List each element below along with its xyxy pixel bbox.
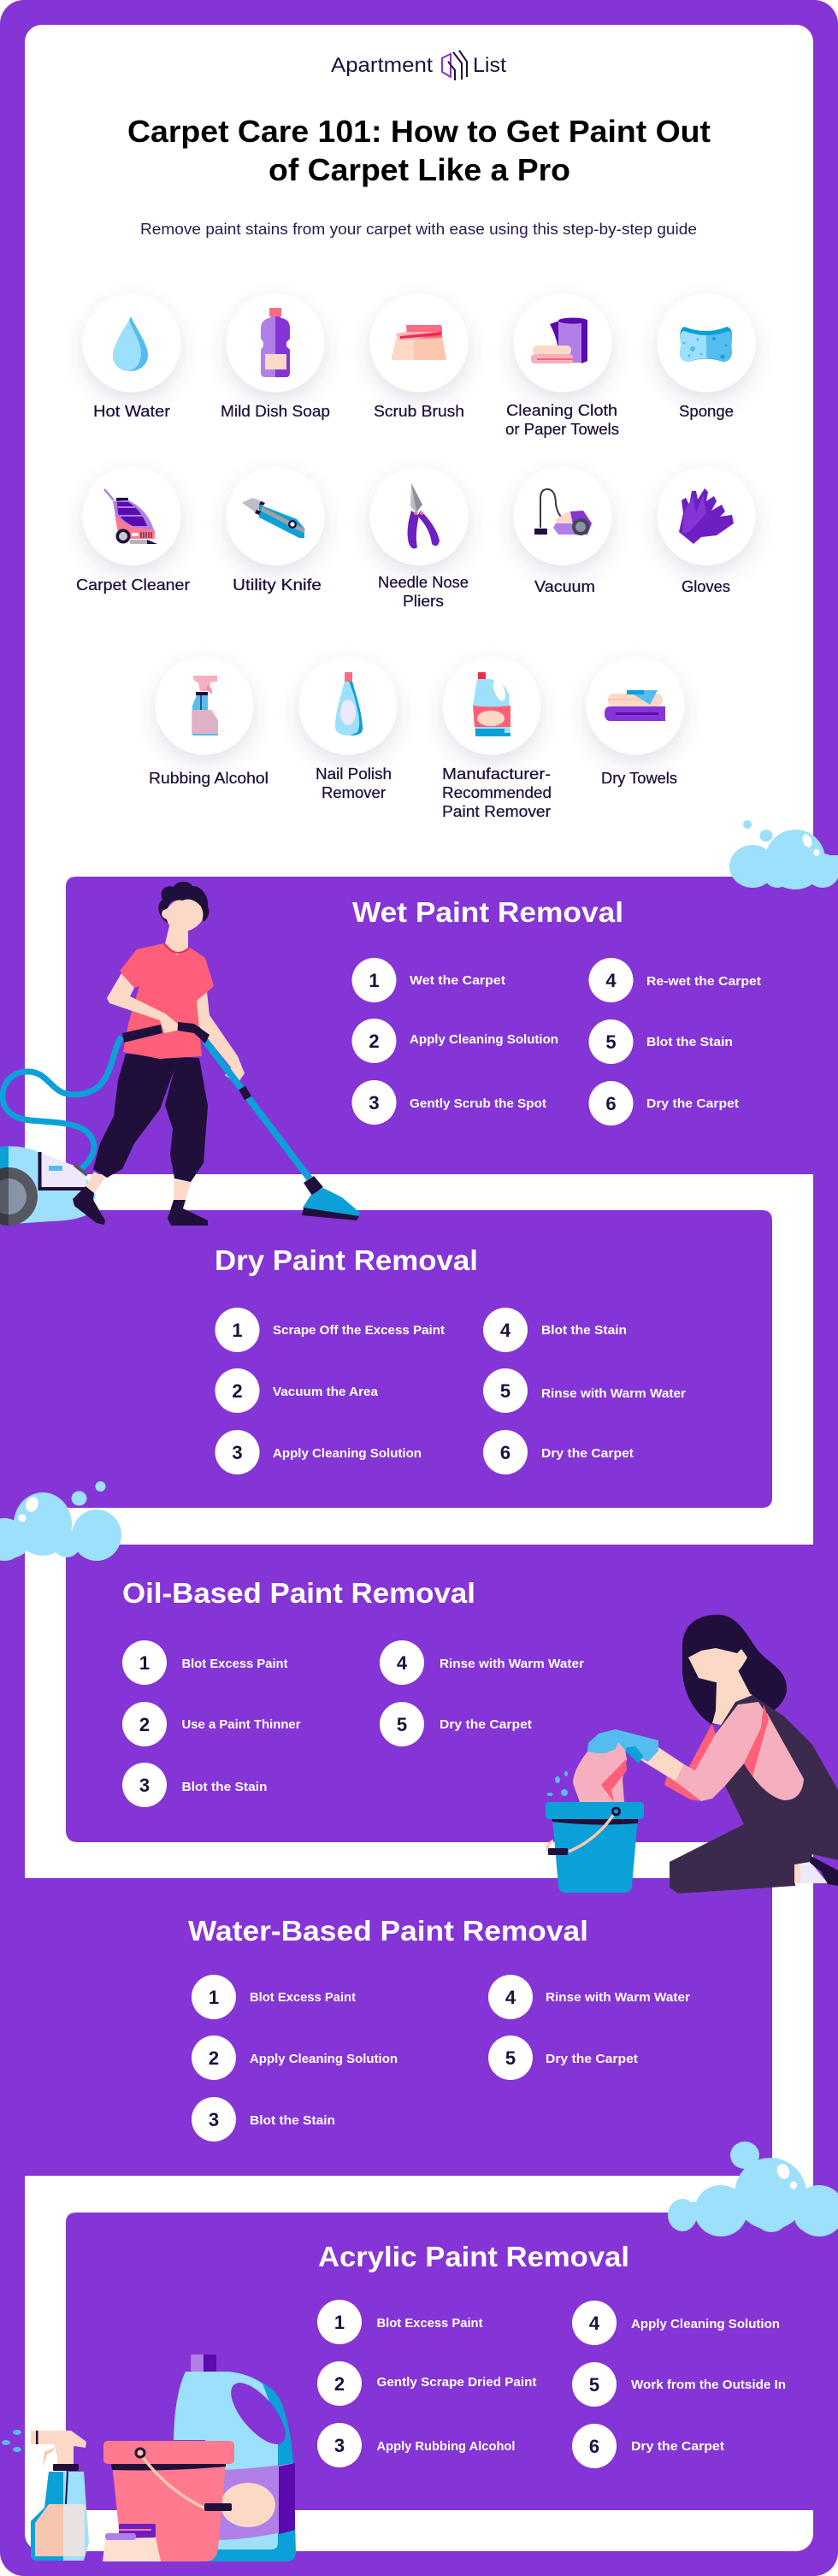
tool: gloves: Gloves (682, 578, 730, 595)
water drops (547, 1771, 568, 1796)
step 1: Blot Excess Paint (376, 2316, 482, 2331)
tool: needle nose pliers: Pliers (403, 593, 444, 610)
tool: gloves (657, 467, 756, 595)
step 3: 3 (139, 1775, 150, 1796)
step 5: 5 (505, 2047, 516, 2069)
wrung cloth (573, 1742, 627, 1802)
step 6: 6 (589, 2436, 599, 2457)
step 6: Dry the Carpet (541, 1446, 634, 1461)
step 3: Blot the Stain (250, 2113, 335, 2128)
step 2 (215, 1368, 379, 1413)
tool: rubbing alcohol: Rubbing Alcohol (149, 770, 269, 787)
legs and shoes (73, 1172, 208, 1226)
step 3 (317, 2423, 515, 2467)
tool: utility knife (226, 467, 325, 594)
step 5 (572, 2362, 786, 2407)
step 5: 5 (500, 1380, 510, 1402)
tool: nail polish remover (299, 657, 397, 801)
panel: acrylic paint removal: Acrylic Paint Removal (318, 2241, 629, 2272)
bucket (546, 1802, 644, 1893)
tool: utility knife: Utility Knife (233, 576, 322, 594)
panel: dry paint removal: Dry Paint Removal (215, 1244, 478, 1276)
step 4 (380, 1640, 584, 1685)
step 5 (488, 2035, 638, 2080)
pink sleeve (676, 1702, 768, 1801)
step 2 (317, 2361, 537, 2406)
step 3: Blot the Stain (181, 1780, 267, 1794)
tool: nail polish remover: Remover (322, 784, 386, 801)
step 4: Rinse with Warm Water (546, 1990, 690, 2005)
neck and chest (712, 1670, 782, 1728)
soap cloud: lower right (668, 2142, 838, 2236)
step 1 (352, 958, 505, 1002)
step 4 (588, 958, 761, 1002)
tool: hot water: Hot Water (93, 403, 170, 420)
pink torso (744, 1713, 804, 1800)
step 2 (352, 1019, 558, 1063)
step 1: Blot Excess Paint (181, 1657, 287, 1671)
step 5: Rinse with Warm Water (541, 1386, 686, 1401)
step 2 (122, 1702, 301, 1746)
logo: Apartment List (331, 50, 506, 80)
step 3: 3 (334, 2435, 345, 2456)
face (162, 900, 204, 931)
trousers (93, 1054, 208, 1182)
wand grip (242, 1088, 248, 1098)
title: of Carpet Like a Pro (269, 152, 570, 187)
step 1: 1 (334, 2312, 345, 2333)
tool: dry towels: Dry Towels (601, 770, 677, 787)
step 6 (572, 2424, 724, 2468)
illustration: cleaning bottles and bucket (2, 2354, 296, 2561)
logo: Apartment List: Apartment (331, 54, 433, 77)
tool: scrub brush (369, 294, 469, 420)
step 1 (317, 2300, 482, 2344)
step 2: 2 (369, 1031, 380, 1052)
step 2: 2 (334, 2373, 345, 2395)
step 1: 1 (209, 1987, 219, 2008)
tool: carpet cleaner (76, 467, 190, 594)
soap cloud: left (0, 1481, 121, 1561)
step 4: Rinse with Warm Water (440, 1657, 584, 1671)
panel: oil-based paint removal: Oil-Based Paint Removal (122, 1577, 475, 1609)
step 1: Blot Excess Paint (250, 1990, 356, 2005)
tool: needle nose pliers (369, 467, 469, 610)
paint brush (103, 2524, 161, 2561)
step 5: Dry the Carpet (440, 1717, 532, 1732)
panel: water-based paint removal: Water-Based Paint Removal (188, 1915, 588, 1947)
tool: scrub brush: Scrub Brush (374, 403, 464, 420)
tool: manufacturer-recommended paint remover: Recommended (442, 784, 552, 801)
step 3: 3 (232, 1442, 243, 1463)
spray bottle (31, 2431, 89, 2561)
step 3: Apply Rubbing Alcohol (376, 2439, 515, 2454)
tool: manufacturer-recommended paint remover: Paint Remover (442, 803, 551, 820)
tool: needle nose pliers: Needle Nose (378, 574, 469, 591)
step 5: Work from the Outside In (631, 2378, 786, 2392)
sock and shoe (794, 1856, 838, 1886)
step 6: Dry the Carpet (631, 2439, 724, 2454)
tool: cleaning cloth or paper towels (505, 294, 619, 438)
step 4: Blot the Stain (541, 1323, 627, 1338)
glove (587, 1729, 658, 1764)
step 2: 2 (209, 2047, 219, 2069)
step 6: 6 (500, 1442, 510, 1463)
step 3: Gently Scrub the Spot (410, 1096, 546, 1111)
step 1: Wet the Carpet (410, 973, 505, 988)
pink bucket (103, 2441, 234, 2561)
step 1: 1 (232, 1320, 243, 1341)
title: Carpet Care 101: How to Get Paint Out (127, 114, 711, 149)
step 2: Use a Paint Thinner (181, 1717, 301, 1732)
step 1 (122, 1640, 287, 1685)
panel: wet paint removal: Wet Paint Removal (352, 896, 623, 928)
overalls (670, 1695, 838, 1894)
step 4: 4 (605, 970, 617, 991)
vacuum wand (205, 1041, 310, 1179)
step 3 (192, 2097, 335, 2142)
tool: dry towels (587, 657, 684, 787)
step 2: 2 (232, 1380, 243, 1402)
step 2: Gently Scrape Dried Paint (376, 2375, 537, 2390)
forearm (640, 1747, 684, 1781)
step 3 (352, 1080, 546, 1125)
step 2 (192, 2035, 398, 2080)
subtitle: Remove paint stains from your carpet with ease using this step-by-step guide (140, 221, 697, 238)
red side (688, 1723, 716, 1772)
tool: nail polish remover: Nail Polish (316, 765, 392, 783)
step 3: 3 (209, 2109, 219, 2130)
tool: vacuum (513, 467, 612, 595)
step 5 (380, 1702, 532, 1746)
hair (682, 1615, 787, 1725)
step 4: 4 (505, 1987, 516, 2008)
right arm (195, 992, 245, 1084)
step 4: 4 (500, 1320, 511, 1341)
title (127, 114, 711, 187)
step 6 (588, 1081, 739, 1126)
step 5: 5 (397, 1714, 407, 1735)
red cuff (664, 1776, 701, 1801)
hair (158, 882, 209, 924)
spray drops (2, 2430, 21, 2452)
step 4: 4 (589, 2313, 600, 2334)
step 4 (572, 2301, 780, 2345)
step 6 (483, 1430, 634, 1474)
tool: carpet cleaner: Carpet Cleaner (76, 576, 190, 594)
step 1: Scrape Off the Excess Paint (273, 1323, 445, 1338)
step 5 (483, 1368, 686, 1413)
step 4: Apply Cleaning Solution (631, 2317, 780, 2331)
panel: acrylic paint removal (66, 2213, 838, 2510)
panel: oil-based paint removal (66, 1545, 838, 1842)
hose handle (122, 1022, 210, 1043)
jug (174, 2372, 296, 2561)
step 3: Apply Cleaning Solution (273, 1446, 422, 1461)
panel: dry paint removal (0, 1210, 772, 1508)
panel: wet paint removal (66, 877, 838, 1174)
tool: vacuum: Vacuum (534, 578, 595, 595)
left arm (107, 973, 178, 1033)
step 3 (215, 1430, 422, 1474)
step 2: Apply Cleaning Solution (410, 1032, 558, 1047)
neck (165, 926, 188, 955)
face (688, 1648, 747, 1682)
tool: manufacturer-recommended paint remover: Manufacturer- (442, 765, 551, 783)
step 4: Re-wet the Carpet (646, 974, 761, 989)
sleeve red accent (744, 1705, 769, 1776)
step 2: 2 (139, 1714, 150, 1735)
step 3: 3 (369, 1092, 380, 1114)
tool: cleaning cloth or paper towels: or Paper Towels (505, 421, 619, 438)
tool: hot water (82, 294, 181, 420)
step 4 (483, 1308, 627, 1352)
cloth red accent (601, 1759, 627, 1802)
tool: cleaning cloth or paper towels: Cleaning Cloth (506, 402, 617, 419)
step 5: Blot the Stain (646, 1035, 733, 1049)
panel: water-based paint removal (0, 1878, 772, 2176)
collar (164, 943, 190, 953)
soap cloud: top right (729, 820, 838, 889)
jug cap (191, 2354, 216, 2372)
logo: Apartment List: List (473, 54, 506, 77)
step 5: 5 (589, 2374, 599, 2396)
step 2: Vacuum the Area (273, 1385, 379, 1399)
step 6: 6 (605, 1093, 617, 1114)
step 1: 1 (139, 1652, 150, 1674)
tool: mild dish soap (221, 294, 330, 420)
step 5: 5 (605, 1031, 617, 1053)
step 4: 4 (397, 1652, 408, 1674)
illustration: woman wringing cloth over a bucket (546, 1615, 838, 1894)
step 5: Dry the Carpet (546, 2052, 638, 2066)
tool: manufacturer-recommended paint remover (442, 657, 552, 820)
illustration: man vacuuming (0, 882, 360, 1226)
vacuum head (302, 1176, 360, 1220)
step 4 (488, 1975, 690, 2019)
step 2: Apply Cleaning Solution (250, 2052, 398, 2066)
vacuum body (0, 1146, 96, 1226)
tool: sponge (657, 294, 756, 420)
tool: sponge: Sponge (679, 403, 734, 420)
vacuum hose (3, 1037, 121, 1170)
step 6: Dry the Carpet (646, 1096, 739, 1111)
shirt (120, 943, 214, 1059)
glove cuff shade (626, 1746, 643, 1764)
step 1 (192, 1975, 356, 2019)
tool: mild dish soap: Mild Dish Soap (221, 403, 330, 420)
step 3 (122, 1763, 267, 1807)
step 1 (215, 1308, 445, 1352)
step 1: 1 (369, 970, 380, 991)
step 5 (588, 1019, 733, 1064)
tool: rubbing alcohol (149, 657, 269, 787)
